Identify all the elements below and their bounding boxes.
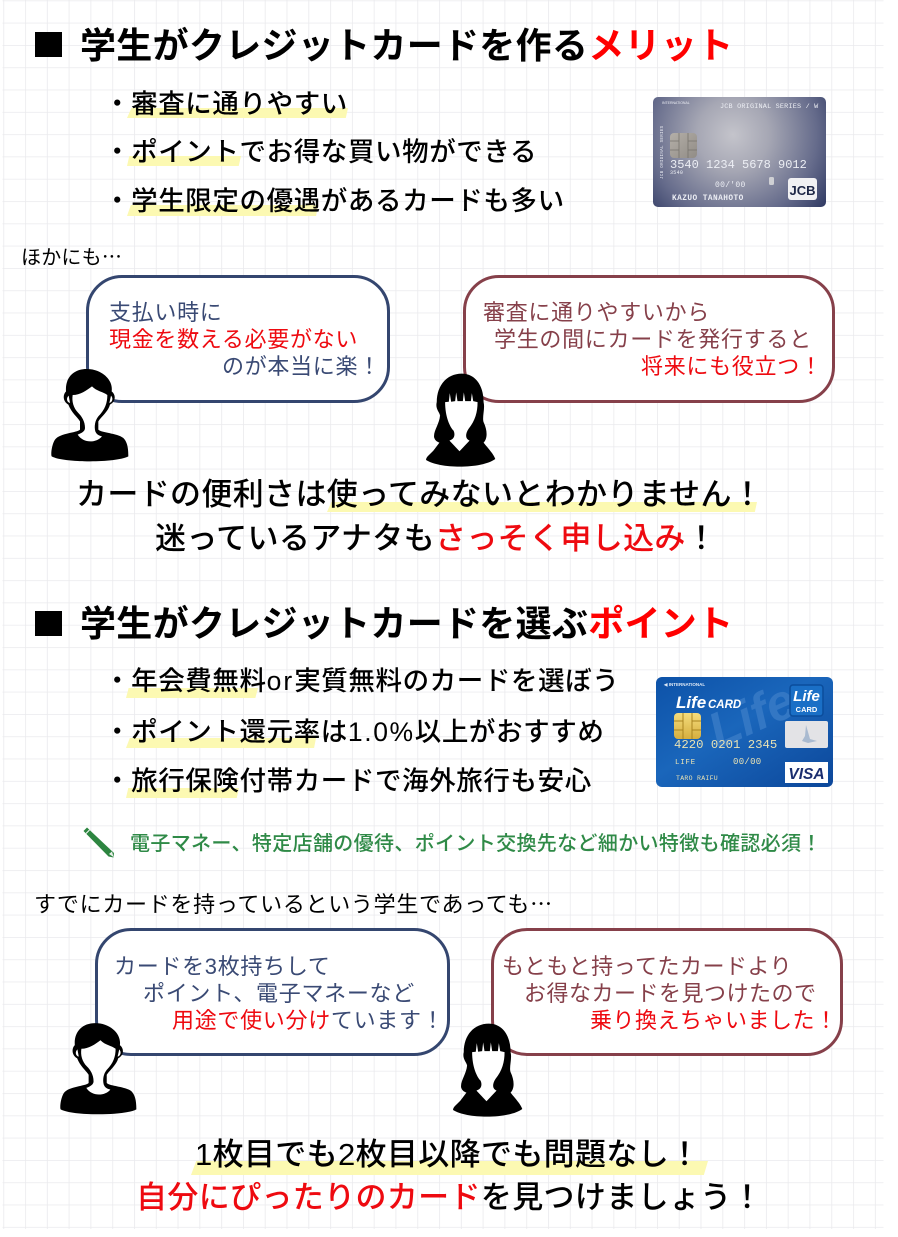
line 2: 学生の間にカードを発行すると: [494, 327, 812, 352]
note: others: ほかにも…: [21, 241, 122, 270]
bullet 3: ・学生限定の優遇があるカードも多い: [104, 186, 565, 216]
JCB card image: JCB ORIGINAL SERIES: [661, 125, 665, 179]
JCB card image: INTERNATIONAL: [662, 101, 690, 105]
conclusion line 1: カードの便利さは使ってみないとわかりません！: [76, 477, 763, 512]
speech text: red: [483, 300, 823, 379]
highlight 3: [126, 788, 239, 798]
heading square: [35, 32, 62, 57]
bullet 3: ・旅行保険付帯カードで海外旅行も安心: [104, 766, 592, 796]
highlight 1: [127, 108, 348, 118]
speech bubble: red: [491, 928, 843, 1056]
icon: pencil: [84, 828, 114, 858]
Life card image: Life: [793, 688, 820, 705]
JCB card image: KAZUO TANAHOTO: [672, 195, 744, 203]
green tip text: 電子マネー、特定店舗の優待、ポイント交換先など細かい特徴も確認必須！: [130, 833, 822, 855]
Life card image: 4220 0201 2345: [674, 738, 777, 752]
heading: points: 学生がクレジットカードを選ぶポイント: [80, 603, 733, 644]
Life card image: CARD: [708, 699, 741, 711]
line 3: のが本当に楽！: [222, 354, 381, 379]
Life card image: [656, 677, 833, 787]
line 1: もともと持ってたカードより: [502, 954, 792, 979]
speech bubble: blue: [95, 928, 450, 1056]
line 3: 乗り換えちゃいました！: [590, 1008, 838, 1033]
JCB card image: JCB: [789, 183, 816, 198]
icon: female person: [453, 1024, 522, 1117]
speech text: blue: [109, 300, 381, 379]
JCB card image: 3540 1234 5678 9012: [670, 158, 807, 172]
line 2: お得なカードを見つけたので: [524, 981, 817, 1006]
panel: selection points: [34, 603, 843, 1215]
line 2: 現金を数える必要がない: [109, 327, 358, 352]
Life card image: VISA: [788, 766, 825, 783]
JCB card image: 3540: [670, 170, 683, 176]
highlight 2: [126, 738, 316, 748]
highlight 3: [127, 205, 318, 216]
heading square: [35, 611, 62, 636]
JCB card image: [653, 97, 826, 207]
highlight 2: [127, 156, 241, 166]
highlight 1: [126, 688, 258, 698]
bullet 1: ・審査に通りやすい: [104, 89, 348, 119]
icon: male person: [51, 369, 128, 462]
bullet 2: ・ポイントでお得な買い物ができる: [104, 137, 537, 167]
speech text: red: [502, 954, 838, 1033]
line 1: 審査に通りやすいから: [483, 300, 710, 325]
conclusion line 2: 自分にぴったりのカードを見つけましょう！: [136, 1180, 763, 1215]
line 2: ポイント、電子マネーなど: [143, 981, 415, 1006]
Life card image: 00/00: [733, 757, 762, 767]
Life card image: Life: [676, 693, 706, 712]
highlight: conclusion: [191, 1161, 708, 1175]
highlight: conclusion: [327, 502, 757, 512]
line 1: 支払い時に: [109, 300, 223, 325]
bullet 1: ・年会費無料or実質無料のカードを選ぼう: [104, 666, 619, 696]
Life card image: ◀ INTERNATIONAL: [663, 682, 705, 687]
conclusion line 1: 1枚目でも2枚目以降でも問題なし！: [195, 1137, 700, 1172]
Life card image: TARO RAIFU: [676, 775, 718, 782]
conclusion line 2: 迷っているアナタもさっそく申し込み！: [155, 521, 717, 556]
speech bubble: red: [463, 275, 835, 403]
bullet 2: ・ポイント還元率は1.0%以上がおすすめ: [104, 717, 604, 747]
line 3: 用途で使い分けています！: [172, 1008, 444, 1033]
speech text: blue: [114, 954, 444, 1033]
Life card image: CARD: [796, 705, 818, 714]
line 1: カードを3枚持ちして: [114, 954, 331, 979]
panel: merits: [21, 25, 835, 556]
JCB card image: 00/'00: [715, 181, 746, 190]
heading: merits: 学生がクレジットカードを作るメリット: [80, 25, 733, 66]
speech bubble: blue: [86, 275, 390, 403]
icon: female person: [426, 374, 496, 467]
line 3: 将来にも役立つ！: [641, 354, 823, 379]
icon: male person: [60, 1023, 136, 1114]
Life card image: LIFE: [675, 759, 696, 767]
JCB card image: JCB ORIGINAL SERIES / W: [720, 103, 819, 111]
note: existing card holders: すでにカードを持っているという学生であっても…: [34, 887, 553, 919]
